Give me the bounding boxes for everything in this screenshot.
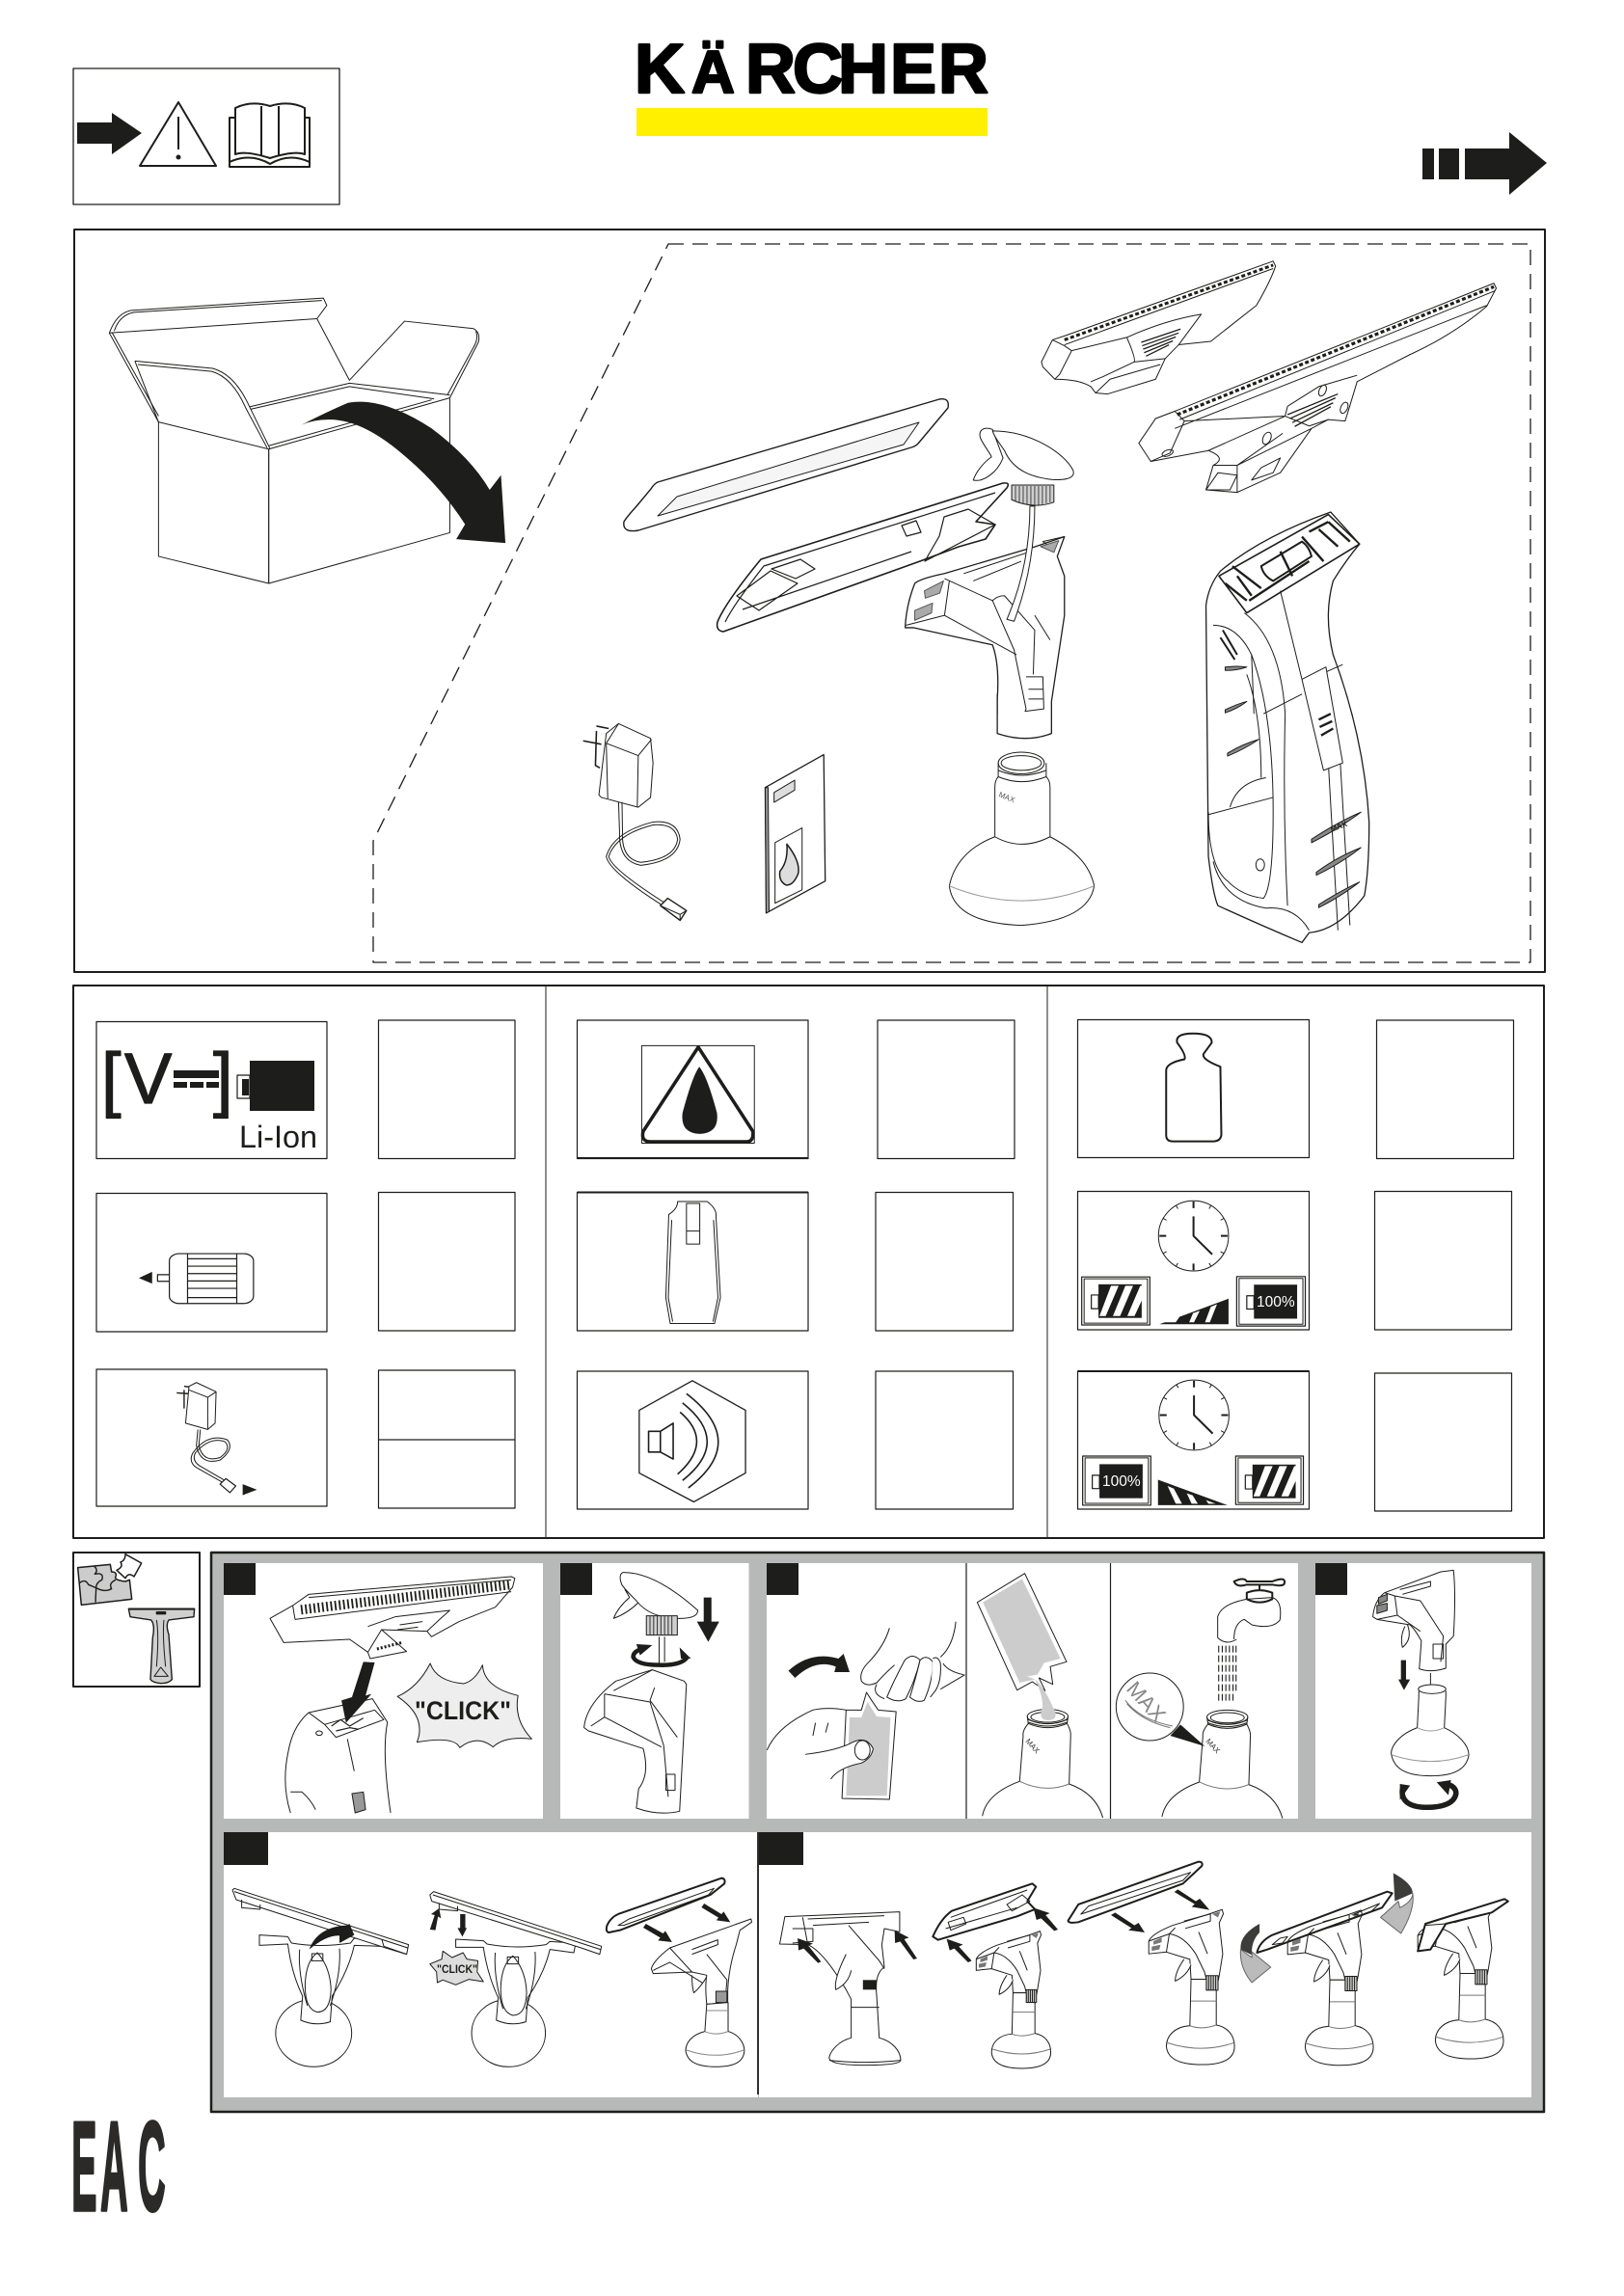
- cell: weight icon: [1078, 1020, 1310, 1157]
- cell: blank values split: [378, 1370, 515, 1508]
- sprayer with pad holder: [780, 1912, 917, 2066]
- finished sprayer: [1418, 1899, 1508, 2059]
- logo: Kärcher wordmark with yellow bar: KÄRCHER: [635, 31, 988, 108]
- step 6: replace pad: [758, 1832, 1531, 2097]
- illustration: pad holder: [717, 483, 1008, 632]
- nozzle: [270, 1577, 515, 1659]
- cell: blank value: [1375, 1192, 1512, 1330]
- icon: device with nozzle: [128, 1608, 195, 1684]
- dip tube: [1007, 506, 1035, 621]
- cell: tank icon: [577, 1192, 808, 1331]
- cell: blank value: [878, 1020, 1015, 1159]
- sachet in hand: [767, 1622, 965, 1799]
- step 1: attach nozzle to device: [224, 1563, 543, 1819]
- header box: arrow, warning and manual icons: [73, 68, 339, 204]
- pad locking rotation: [1240, 1873, 1413, 2066]
- rotation arrow: [634, 1644, 691, 1665]
- icon: continue arrow: [1422, 132, 1547, 195]
- illustration: long squeegee nozzle: [1139, 284, 1497, 493]
- illustration: window vac device: [1206, 512, 1369, 942]
- icon: warning triangle: [140, 102, 216, 166]
- cell: sound level icon: [577, 1371, 808, 1509]
- downward arrow: [341, 1661, 375, 1723]
- arrow: out of the box: [301, 402, 505, 543]
- second assembly: [430, 1892, 602, 2066]
- label: click: "CLICK": [415, 1696, 511, 1725]
- cell: motor icon: [96, 1194, 327, 1332]
- panel: package contents: [74, 230, 1545, 972]
- cell: blank value: [876, 1371, 1013, 1509]
- step 2: fit spray head: [560, 1563, 748, 1819]
- icon: open manual: [230, 103, 310, 167]
- device release button: [1302, 667, 1342, 770]
- cell: blank value: [876, 1192, 1013, 1331]
- panel: technical data table: [73, 986, 1544, 1538]
- label: MAX on device: MAX: [1329, 820, 1349, 834]
- logo: EAC conformity mark: EAC: [71, 2095, 166, 2237]
- step 3: add detergent and water: [767, 1563, 1298, 1819]
- handle: [285, 1699, 391, 1813]
- label: MAX on bottle: MAX: [997, 791, 1016, 805]
- pad holder removal: [933, 1883, 1058, 2068]
- illustration: spray bottle: [949, 752, 1095, 926]
- sachet pouring: [977, 1574, 1103, 1818]
- label: 100%: 100%: [1102, 1473, 1141, 1490]
- illustration: short squeegee nozzle: [1042, 261, 1276, 394]
- illustration: microfibre pad: [624, 399, 948, 531]
- step 5: attach long squeegee: [224, 1832, 758, 2097]
- click burst: [397, 1663, 531, 1747]
- step 4: screw on bottle: [1315, 1563, 1531, 1819]
- downward arrow: [697, 1598, 719, 1642]
- cell: charging time icon: [1078, 1192, 1310, 1330]
- illustration: detergent sachet card: [765, 755, 826, 913]
- icon: puzzle: [78, 1554, 142, 1605]
- label: click: "CLICK": [437, 1962, 477, 1976]
- cell: blank value: [1375, 1373, 1512, 1511]
- cell: run time icon: [1078, 1371, 1310, 1509]
- new pad fitting: [1069, 1862, 1234, 2065]
- icon: arrow: [77, 113, 142, 154]
- label: MAX magnified: MAX: [1122, 1677, 1171, 1727]
- rotation arrow: [1400, 1780, 1456, 1807]
- cell: blank value: [378, 1020, 515, 1159]
- panel: assembly steps: [211, 1553, 1544, 2112]
- cell: battery voltage icon: [V]: [101, 1039, 233, 1119]
- panel: assembly icon box: [73, 1553, 200, 1687]
- illustration: open cardboard box: [109, 298, 479, 583]
- label: MAX on filled bottle: MAX: [1204, 1737, 1222, 1756]
- cell: battery voltage icon: Li-Ion: [239, 1120, 317, 1154]
- dashed outline of scope of delivery: [373, 244, 1530, 962]
- cell: battery voltage icon: [96, 1022, 327, 1159]
- first assembly: [232, 1888, 409, 2066]
- cell: charger icon: [96, 1369, 327, 1506]
- cell: blank value: [378, 1192, 515, 1331]
- device head socket: [1219, 515, 1360, 613]
- cell: blank value: [1377, 1020, 1514, 1159]
- illustration: spray head: [973, 428, 1073, 505]
- sprayer with pad and arrows: [607, 1878, 752, 2066]
- illustration: charger: [583, 723, 687, 920]
- cell: detergent warning icon: [577, 1020, 808, 1159]
- label: MAX on poured bottle: MAX: [1024, 1737, 1042, 1756]
- tap filling bottle: [1116, 1579, 1285, 1819]
- illustration: spray bottle nozzle body: [906, 506, 1065, 739]
- label: 100%: 100%: [1257, 1294, 1295, 1310]
